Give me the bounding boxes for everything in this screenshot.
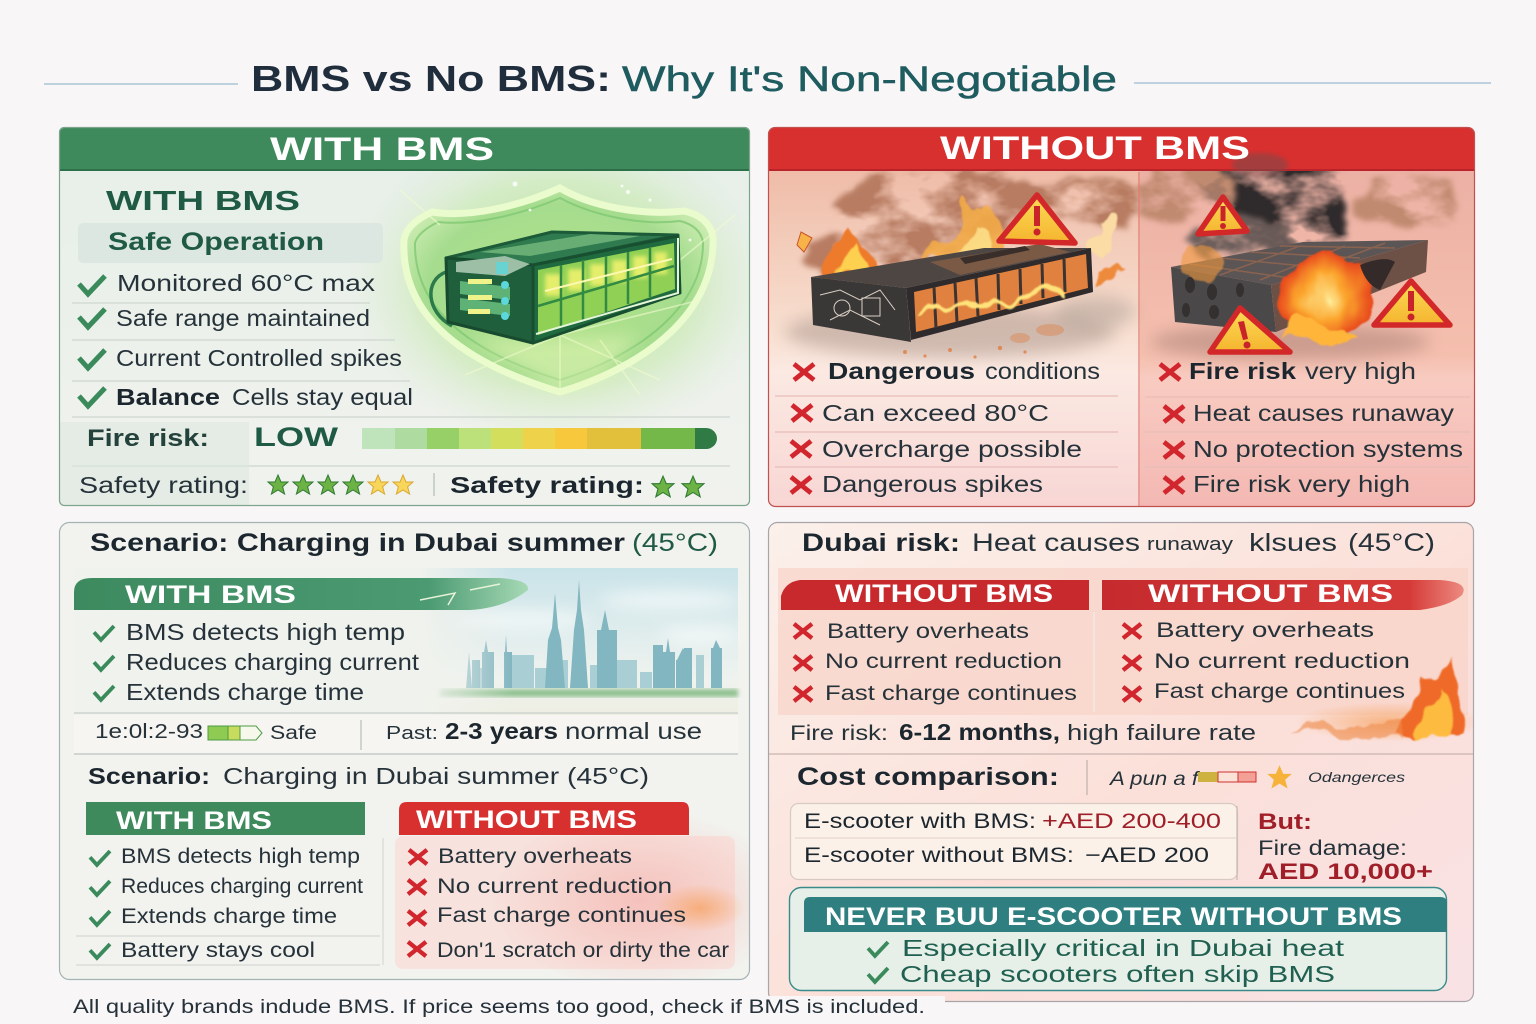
- heading: scenario: (45°C): [632, 529, 718, 557]
- check list: scenario: Reduces charging current: [126, 649, 420, 675]
- footer note: [60, 996, 945, 1024]
- safety rating row: Safety rating:: [450, 472, 644, 498]
- label: safe operation: Safe Operation: [108, 228, 324, 256]
- tab: without BMS left: WITHOUT BMS: [835, 580, 1053, 608]
- heading: scenario: Scenario: Charging in Dubai summer: [90, 529, 625, 557]
- callout list: [868, 935, 1345, 987]
- check list: with BMS compare: Extends charge time: [121, 905, 337, 928]
- cross list: without BMS compare: Fast charge continues: [437, 904, 686, 927]
- tab: without BMS right: WITHOUT BMS: [1148, 580, 1393, 608]
- cost table: −AED 200: [1085, 844, 1209, 867]
- banner: with BMS: [74, 578, 528, 610]
- callout: fire damage cost: [1258, 809, 1433, 884]
- subheading: with BMS: WITH BMS: [106, 185, 300, 216]
- legend: rating scribble: [1087, 760, 1405, 795]
- title: [44, 58, 1491, 99]
- header bar: without BMS: WITHOUT BMS: [940, 130, 1250, 166]
- check list: with BMS: [72, 270, 730, 466]
- icon: battery: [208, 726, 262, 740]
- title: Why It's Non-Negotiable: [622, 60, 1117, 99]
- fire risk line: high failure rate: [1067, 720, 1256, 745]
- fire risk gauge: LOW: [254, 422, 339, 452]
- fire risk line: 6-12 months,: [899, 719, 1060, 745]
- heading: Dubai risk: runaway: [1147, 534, 1233, 554]
- tab: with BMS: [86, 802, 365, 835]
- cross list: right column: Fast charge continues: [1154, 680, 1405, 703]
- column divider: [1138, 172, 1140, 507]
- illustration: burning battery right: [1135, 171, 1460, 366]
- heading: Dubai risk: Heat causes: [972, 529, 1140, 557]
- safety rating row: [79, 472, 704, 498]
- cross list: right: Fire risk very high: [1193, 471, 1410, 497]
- heading: cost comparison: Cost comparison:: [797, 763, 1059, 791]
- icons: warning triangles: [999, 195, 1450, 352]
- tab: without BMS left: [781, 580, 1089, 610]
- illustration: Dubai skyline: [74, 568, 740, 715]
- header bar: with BMS: WITH BMS: [270, 131, 494, 167]
- red tint: without BMS column: [395, 834, 749, 972]
- heading: Dubai risk: klsues: [1249, 529, 1337, 557]
- fire risk line: [792, 723, 1255, 744]
- illustration: shield with battery: [400, 182, 735, 395]
- callout: fire damage cost: AED 10,000+: [1258, 859, 1433, 884]
- banner: with BMS: WITH BMS: [125, 581, 296, 609]
- check list: with BMS compare: Battery stays cool: [121, 939, 315, 962]
- tab: with BMS: WITH BMS: [116, 807, 272, 835]
- cross list: without BMS compare: Battery overheats: [438, 845, 632, 868]
- battery: [431, 232, 680, 343]
- cross list: left: conditions: [985, 358, 1100, 384]
- cross list: right: Fire risk: [1189, 358, 1296, 384]
- status row: 2-3 years: [445, 718, 558, 744]
- status row: 1e:0l:2-93: [95, 721, 203, 743]
- cross list: right column: No current reduction: [1154, 650, 1410, 673]
- fire risk gauge: [59, 422, 717, 506]
- cross list: right column: [1123, 619, 1410, 703]
- cross list: right: No protection systems: [1193, 436, 1463, 462]
- heading: Dubai risk: [804, 533, 1434, 556]
- check list: with BMS: Monitored 60°C max: [117, 270, 376, 296]
- check list: with BMS: Current Controlled spikes: [116, 345, 402, 371]
- callout: never buy without BMS: [790, 888, 1447, 990]
- cross list: left: Dangerous: [828, 358, 975, 384]
- cost table: E-scooter with BMS:: [804, 810, 1036, 833]
- check list: scenario: [94, 619, 420, 705]
- panel: without BMS: [768, 127, 1475, 507]
- cross list: right: very high: [1305, 358, 1416, 384]
- fire risk gauge: Fire risk:: [87, 425, 209, 452]
- status row: normal use: [565, 718, 702, 744]
- safety rating row: Safety rating:: [79, 472, 248, 498]
- legend: rating scribble: A pun a f: [1109, 769, 1200, 790]
- cost table: [790, 804, 1238, 880]
- check list: with BMS compare: Reduces charging current: [121, 875, 363, 898]
- cross list: left column: [794, 612, 1094, 712]
- heading: scenario comparison: Charging in Dubai summer (45°C): [223, 763, 649, 789]
- cross list: left: Overcharge possible: [822, 436, 1082, 462]
- heading: scenario comparison: [88, 763, 649, 789]
- title: BMS vs No BMS:: [251, 58, 611, 99]
- label: safe operation: [78, 223, 383, 263]
- callout: fire damage cost: Fire damage:: [1258, 837, 1407, 860]
- fire risk line: Fire risk:: [790, 722, 888, 745]
- cross list: left: Can exceed 80°C: [822, 400, 1049, 426]
- check list: scenario: BMS detects high temp: [126, 619, 405, 645]
- tab: without BMS: WITHOUT BMS: [416, 806, 637, 834]
- heading: Dubai risk: Dubai risk:: [802, 529, 960, 557]
- panel: with BMS: [59, 125, 775, 506]
- tab: without BMS right: [1102, 580, 1464, 610]
- cross list: right: [1145, 358, 1470, 497]
- cross list: left: [775, 358, 1118, 497]
- cost table: +AED 200-400: [1042, 810, 1221, 833]
- callout list: Cheap scooters often skip BMS: [900, 961, 1335, 987]
- check list: with BMS: Cells stay equal: [232, 384, 413, 410]
- cross list: left column: Fast charge continues: [825, 682, 1077, 705]
- panel: Dubai scenario with BMS: [60, 522, 790, 990]
- cross list: without BMS compare: Don'1 scratch or dirty the car: [437, 939, 729, 962]
- callout header: NEVER BUU E-SCOOTER WITHOUT BMS: [825, 903, 1402, 931]
- check list: with BMS compare: [76, 838, 383, 965]
- status row: Past:: [386, 723, 438, 743]
- cross list: left: Dangerous spikes: [822, 471, 1043, 497]
- footer note: All quality brands indude BMS. If price seems too good, check if BMS is included.: [73, 997, 925, 1018]
- tab: without BMS: [399, 802, 689, 835]
- cross list: without BMS compare: No current reduction: [437, 875, 672, 898]
- heading: Dubai risk: (45°C): [1348, 529, 1435, 557]
- check list: with BMS: Balance: [116, 384, 220, 410]
- cross list: left column: No current reduction: [825, 650, 1062, 673]
- panel: Dubai risk without BMS: [768, 522, 1485, 1002]
- check list: with BMS compare: BMS detects high temp: [121, 845, 360, 868]
- illustration: burning battery left: [785, 169, 1141, 359]
- rays: [400, 190, 735, 395]
- check list: scenario: Extends charge time: [126, 679, 364, 705]
- status row: Safe: [270, 723, 317, 744]
- cost table: E-scooter without BMS:: [804, 844, 1074, 867]
- cross list: right: Heat causes runaway: [1193, 400, 1455, 426]
- callout header: [804, 897, 1447, 932]
- heading: scenario comparison: Scenario:: [88, 763, 210, 789]
- callout: fire damage cost: But:: [1258, 809, 1312, 834]
- gauge bar: [362, 428, 717, 449]
- callout list: Especially critical in Dubai heat: [902, 935, 1345, 961]
- header bar: with BMS: [59, 127, 750, 171]
- cross list: left column: Battery overheats: [827, 620, 1029, 643]
- check list: with BMS: Safe range maintained: [116, 305, 370, 331]
- illustration: flames: [1291, 656, 1473, 742]
- header bar: without BMS: [768, 127, 1475, 177]
- legend: rating scribble: Odangerces: [1308, 769, 1405, 785]
- marks: exclamation signs: [1034, 206, 1414, 348]
- cross list: right column: Battery overheats: [1156, 619, 1374, 642]
- cross list: without BMS compare: [408, 845, 729, 962]
- status row: [74, 713, 738, 754]
